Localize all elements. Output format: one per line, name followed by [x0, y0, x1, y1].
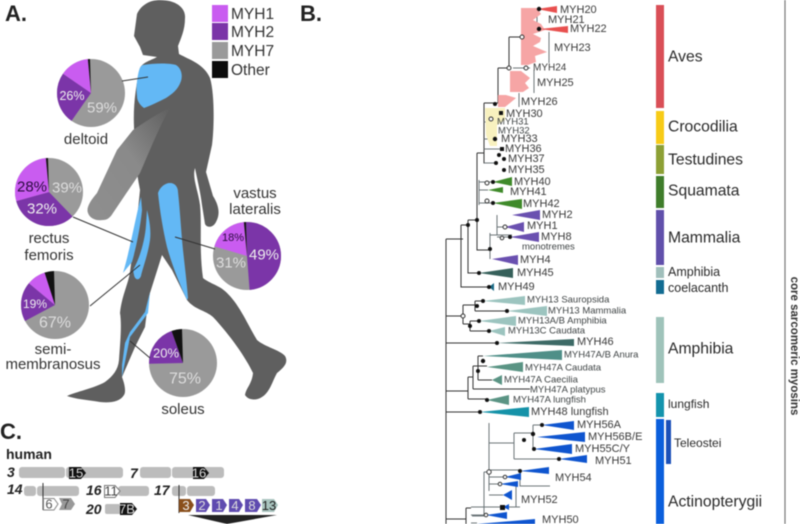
tree tip labels: MYH36 [505, 143, 542, 155]
tree tip labels: MYH48 lungfish [531, 406, 609, 418]
pie percentages [17, 89, 279, 388]
tree tip labels: MYH13 Mammalia [548, 306, 627, 316]
tree tip labels: MYH13C Caudata [508, 326, 586, 336]
pie percentages: 49% [249, 246, 279, 264]
clade triangles: MYH46 to MYH48 [480, 339, 574, 417]
clade triangles: Squamata [488, 177, 522, 209]
taxon labels: Amphibia [668, 265, 720, 279]
pie percentages: 19% [23, 297, 47, 311]
black wedge [188, 515, 277, 524]
chromosome numbers: 14 [7, 481, 23, 497]
panel label A: A. [5, 1, 27, 26]
chromosome 17 gene cluster: 3 [182, 498, 190, 513]
chromosome 17 gene cluster: 2 [198, 498, 206, 513]
muscle names: semi- [35, 341, 71, 358]
tree tip labels: monotremes [522, 242, 575, 252]
taxon labels: coelacanth [668, 281, 729, 295]
tree tip labels: MYH41 [510, 186, 547, 198]
black gene blocks: 7B [119, 502, 135, 516]
muscle names: lateralis [229, 201, 281, 218]
pie: rectus femoris [15, 158, 83, 226]
human body silhouette [67, 0, 286, 402]
panel label C: C. [0, 419, 22, 444]
tree nodes [466, 7, 561, 510]
muscle names: soleus [161, 401, 205, 418]
pie percentages: 75% [169, 370, 201, 388]
chromosome 17 gene cluster [179, 485, 278, 513]
chromosome numbers: 3 [7, 464, 15, 480]
legend [212, 5, 274, 79]
taxon labels: Testudines [668, 152, 743, 168]
tree tip labels: MYH47A platypus [530, 384, 606, 396]
pie percentages: 31% [216, 254, 246, 272]
panel: A muscle composition [5, 0, 286, 418]
tree tip labels: MYH47A Caecilia [504, 374, 579, 386]
tree tip labels: MYH4 [520, 254, 551, 266]
pie percentages: 20% [153, 346, 179, 360]
taxon labels: Mammalia [668, 230, 741, 246]
muscle: vastus lateralis [158, 183, 188, 300]
tree tip labels: MYH22 [570, 23, 607, 35]
legend: Other [231, 62, 270, 79]
tree tip labels: MYH20 [560, 4, 597, 16]
pie: soleus [149, 329, 217, 397]
taxon labels: Squamata [668, 182, 740, 200]
pie percentages: 39% [52, 180, 82, 196]
chromosome 17 gene cluster: 8 [248, 498, 256, 513]
muscle: deltoid [137, 64, 182, 108]
tree tip labels: MYH54 [555, 472, 592, 484]
clade: Aves pale block [498, 8, 547, 107]
pie percentages: 26% [59, 89, 85, 103]
tree tip labels: MYH1 [527, 220, 558, 232]
tree tip labels: MYH37 [508, 153, 545, 165]
taxon labels: Aves [668, 48, 703, 66]
tree tip labels: MYH52 [521, 494, 558, 506]
taxon labels: Crocodilia [668, 118, 738, 136]
clade triangles: MYH13 [479, 296, 547, 336]
genes 6 and 7: 7 [62, 496, 70, 512]
tree tip labels: MYH42 [523, 198, 560, 210]
taxon labels: Teleostei [674, 436, 721, 450]
black gene blocks: 15 [69, 466, 83, 480]
pie percentages: 28% [17, 178, 47, 196]
tree tip labels: MYH25 [537, 77, 574, 89]
clade triangles: Actinopterygii [477, 421, 587, 524]
tree tip labels: MYH56A [577, 419, 622, 431]
black gene blocks: 16 [192, 466, 206, 480]
tree tip labels: MYH45 [517, 267, 554, 279]
chromosome numbers [7, 464, 171, 517]
taxon labels: Actinopterygii [668, 494, 762, 510]
chromosome numbers: 20 [85, 501, 102, 517]
tree branches [446, 9, 559, 524]
bracket label: core sarcomeric myosins [788, 277, 800, 415]
tree tip labels: MYH33 [501, 133, 538, 145]
muscle names [5, 131, 281, 418]
pie: semimembranosus [21, 271, 89, 339]
clade triangles: Mammalia [492, 210, 540, 265]
pie: vastus lateralis [213, 222, 281, 290]
tree tip labels: MYH51 [595, 455, 632, 467]
tree tip labels [497, 4, 642, 524]
taxon labels: lungfish [668, 397, 709, 411]
bracket line [784, 0, 786, 524]
tree tip labels: MYH13A/B Amphibia [518, 316, 607, 326]
muscle names: femoris [24, 247, 74, 264]
chromosome numbers: 16 [86, 482, 102, 498]
pie percentages: 18% [222, 232, 244, 244]
tree tip labels: MYH56B/E [588, 431, 642, 443]
gene 11: 11 [104, 484, 118, 498]
chromosome numbers: 7 [130, 465, 139, 481]
panel label B: B. [300, 1, 322, 26]
legend: MYH7 [231, 43, 274, 60]
clade triangles: Aves [537, 6, 568, 33]
muscle names: vastus [233, 185, 277, 202]
clade: Crocodilia and Testudines pale block [485, 108, 505, 146]
clade triangles: MYH45 and MYH49 [479, 268, 513, 291]
tree tip labels: MYH47A lungfish [513, 394, 586, 406]
tree tip labels: MYH26 [521, 96, 558, 108]
tree tip labels: MYH31 [497, 116, 529, 128]
tree tip labels: MYH55C/Y [575, 443, 631, 455]
panel: B phylogeny [300, 0, 800, 524]
pie percentages: 59% [87, 100, 117, 116]
panel: C synteny [0, 419, 278, 524]
chromosome numbers: 17 [154, 482, 171, 498]
open tree nodes [461, 35, 528, 517]
chromosome bars [19, 467, 224, 514]
tree tip labels: MYH8 [541, 231, 572, 243]
muscle names: membranosus [5, 356, 101, 373]
connector lines [73, 77, 215, 358]
tree tip labels: MYH13 Sauropsida [527, 294, 610, 306]
tree tip labels: MYH30 [506, 108, 543, 120]
legend: MYH1 [231, 6, 274, 23]
tree tip labels: MYH46 [577, 336, 614, 348]
tree tip labels: MYH21 [548, 14, 585, 26]
tree tip labels: MYH2 [542, 209, 573, 221]
tree tip labels: MYH47A/B Anura [564, 350, 639, 360]
tree tip labels: MYH47A Caudata [525, 362, 602, 374]
heading human: human [6, 446, 52, 462]
pie percentages: 67% [39, 314, 71, 332]
taxon labels [668, 48, 762, 510]
tree tip labels: MYH23 [554, 42, 591, 54]
tree tip labels: MYH49 [498, 281, 535, 293]
chromosome 17 gene cluster: 4 [231, 498, 239, 513]
muscle names: deltoid [64, 131, 108, 148]
chromosome 17 gene cluster: 1 [215, 498, 223, 513]
legend: MYH2 [231, 24, 274, 41]
muscle: rectus femoris [123, 197, 150, 279]
black gene blocks [69, 466, 209, 516]
genes 6 and 7 [43, 483, 75, 512]
tree tip labels: MYH32 [498, 126, 530, 136]
genes 6 and 7: 6 [45, 496, 53, 512]
chromosome 17 gene cluster: 13 [262, 498, 276, 513]
tree tip labels: MYH40 [514, 176, 551, 188]
taxon colour bars [656, 5, 671, 524]
tree tip labels: MYH24 [533, 62, 567, 74]
muscle: soleus [122, 292, 150, 377]
pie: deltoid [57, 59, 125, 127]
taxon labels: Amphibia [668, 340, 734, 358]
tree tip labels: MYH35 [508, 164, 545, 176]
pie percentages: 32% [27, 200, 57, 218]
muscle names: rectus [29, 230, 69, 247]
